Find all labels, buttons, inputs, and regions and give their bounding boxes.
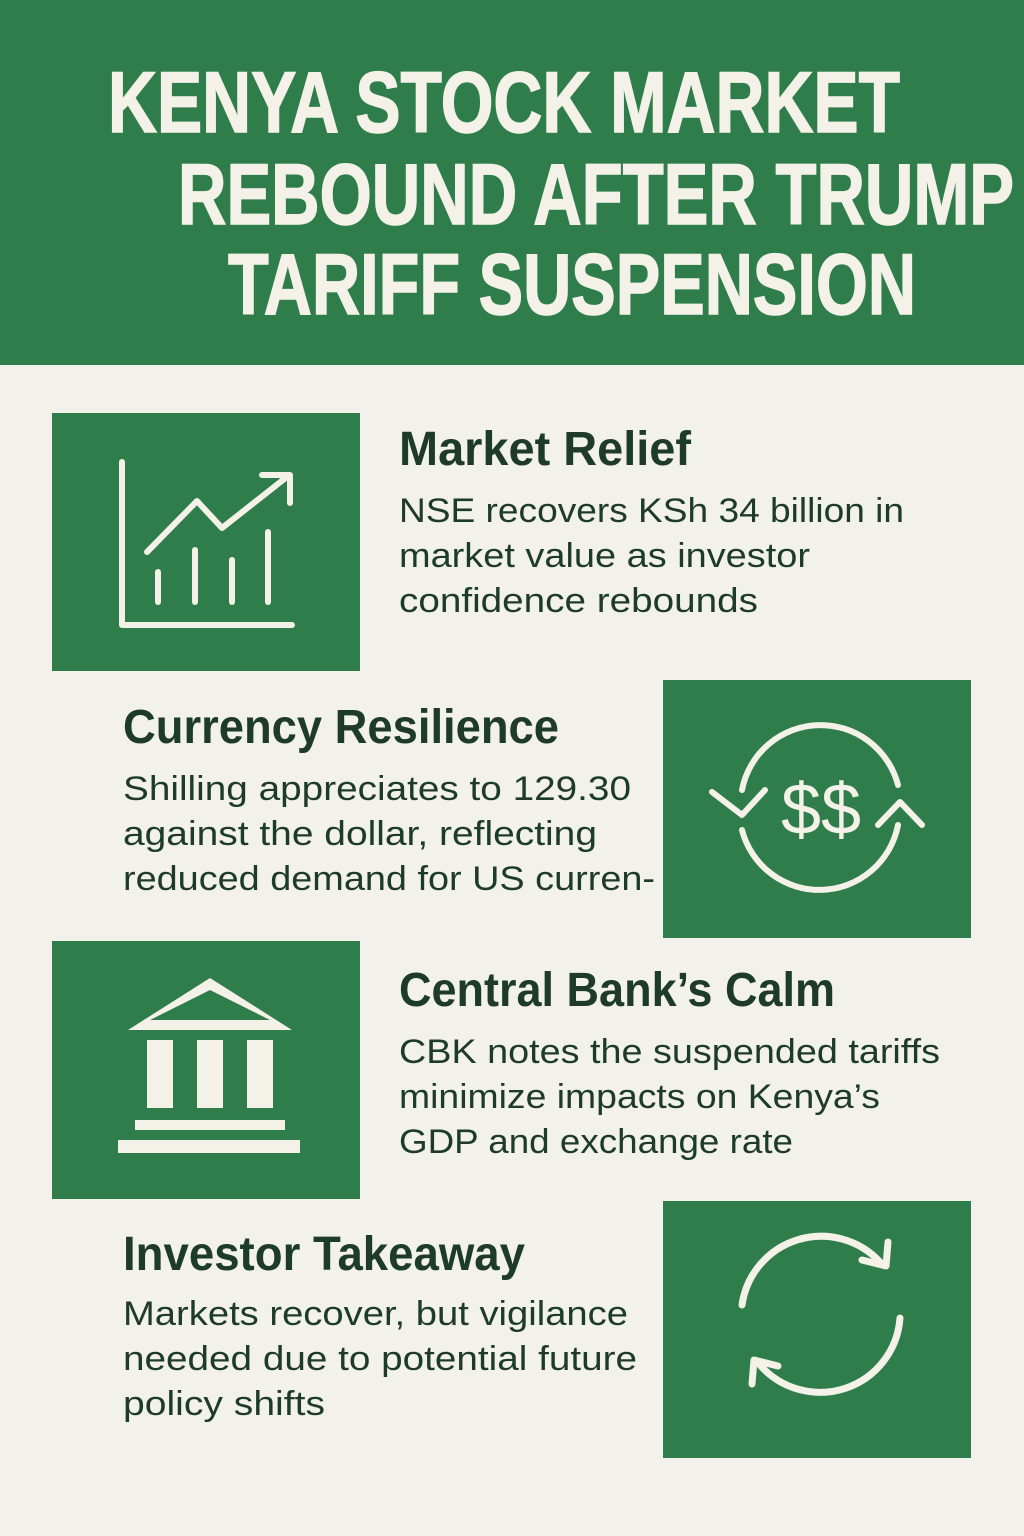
text: market relief: confidence rebounds bbox=[399, 582, 758, 620]
text: currency resilience bbox=[123, 701, 655, 898]
text: investor takeaway: Investor Takeaway bbox=[123, 1228, 525, 1281]
panel: central bank icon bbox=[52, 941, 360, 1199]
text: central bank's calm: minimize impacts on Kenya’s bbox=[399, 1078, 880, 1116]
text: investor takeaway: needed due to potential future bbox=[123, 1340, 637, 1378]
text: market relief: NSE recovers KSh 34 billion in bbox=[399, 492, 904, 530]
text: central bank's calm bbox=[399, 964, 940, 1161]
text: investor takeaway bbox=[123, 1228, 637, 1423]
text: currency resilience: Shilling appreciates to 129.30 bbox=[123, 770, 631, 808]
text: market relief bbox=[399, 423, 904, 620]
text: central bank's calm: GDP and exchange rate bbox=[399, 1123, 793, 1161]
text: market relief: market value as investor bbox=[399, 537, 810, 575]
text: currency resilience: against the dollar, reflecting bbox=[123, 815, 597, 853]
text: market relief: Market Relief bbox=[399, 423, 692, 476]
text: central bank's calm: Central Bank’s Calm bbox=[399, 964, 835, 1017]
text: currency resilience: reduced demand for US curren- bbox=[123, 860, 655, 898]
text: investor takeaway: Markets recover, but vigilance bbox=[123, 1295, 628, 1333]
title bbox=[108, 55, 1014, 333]
panel: currency icon: $$ bbox=[781, 770, 861, 850]
panel: market relief icon bbox=[52, 413, 360, 671]
header banner bbox=[0, 0, 1024, 365]
text: currency resilience: Currency Resilience bbox=[123, 701, 559, 754]
text: central bank's calm: CBK notes the suspended tariffs bbox=[399, 1033, 940, 1071]
panel: currency icon bbox=[663, 680, 971, 938]
panel: refresh icon bbox=[663, 1201, 971, 1458]
text: investor takeaway: policy shifts bbox=[123, 1385, 325, 1423]
